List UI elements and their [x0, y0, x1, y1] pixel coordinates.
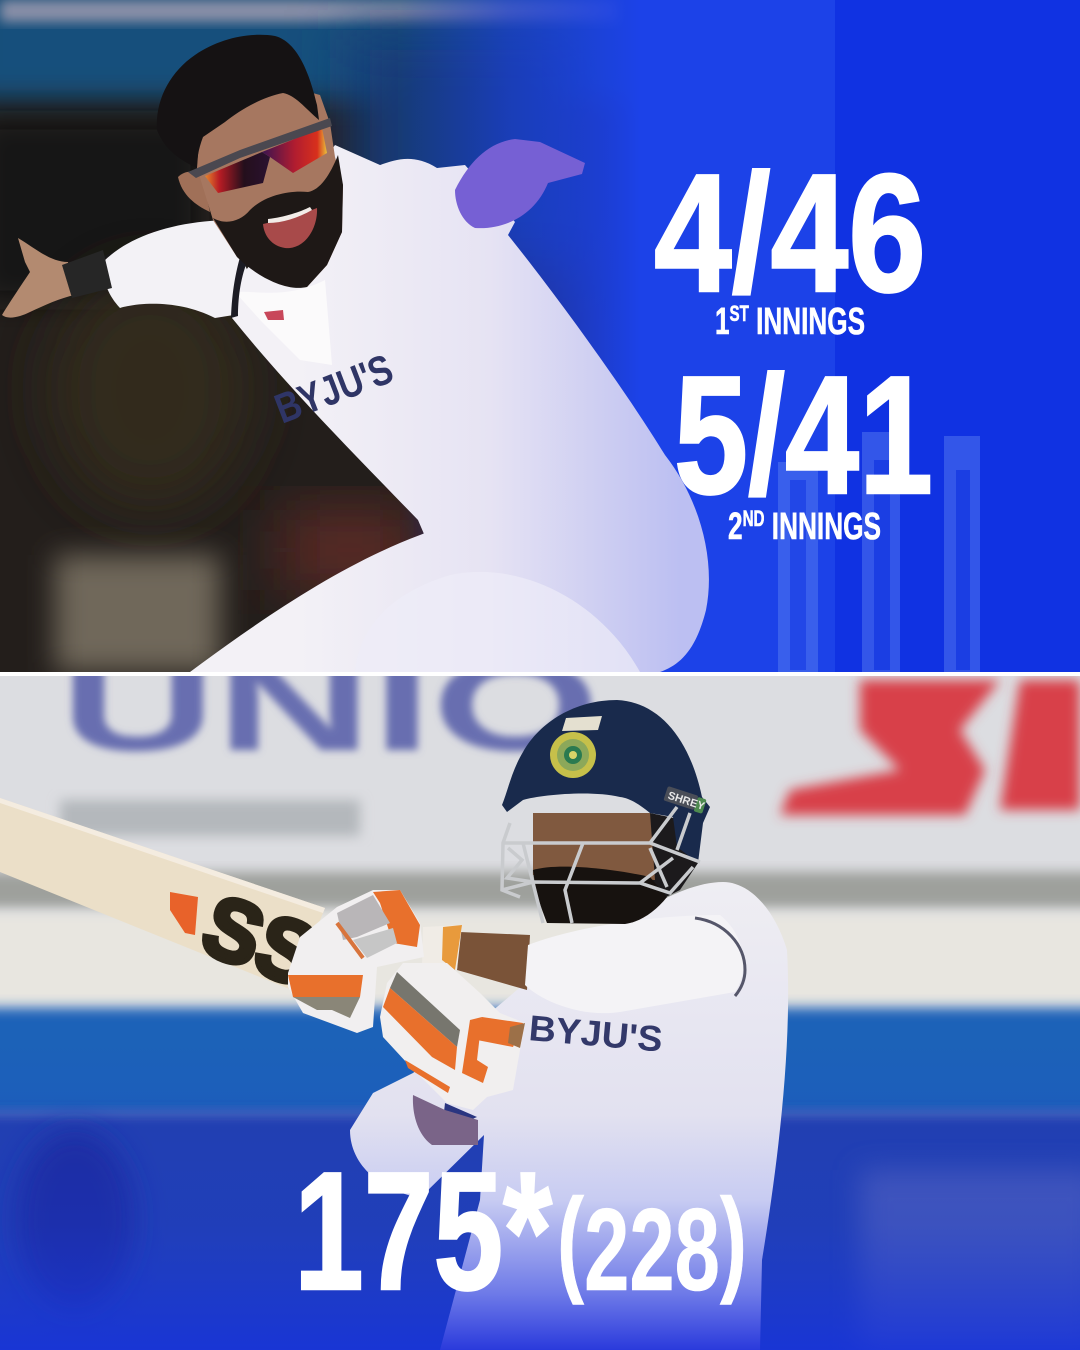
lower sleeve and torso: [350, 882, 788, 1350]
left glove: [288, 890, 424, 1033]
open mouth: [263, 208, 317, 248]
label: first innings: ST: [730, 301, 749, 326]
right glove: [380, 963, 525, 1120]
forearm: [457, 932, 530, 990]
label: second innings: INNINGS: [765, 506, 881, 548]
wrist guard: [457, 932, 462, 970]
batting score: 175*: [294, 1137, 552, 1325]
batter figure: [288, 700, 788, 1350]
bat logo: SS: [191, 875, 330, 1006]
back arm sleeve: [105, 220, 247, 318]
bowling figure: first innings: 4/46: [654, 139, 926, 327]
face: [533, 813, 655, 880]
blurred ground background: [0, 632, 1080, 1350]
panel: bowling photo: [0, 0, 1080, 672]
label: second innings: 2: [728, 506, 749, 548]
sunglasses: [188, 118, 332, 193]
lower wrist: [413, 1095, 478, 1145]
hair: [157, 35, 319, 168]
sleeve: [525, 915, 743, 1013]
label: first innings: 1: [715, 301, 736, 343]
helmet flag: [562, 716, 602, 731]
ear: [178, 172, 210, 212]
balls faced: ): [720, 1174, 747, 1305]
trousers: [190, 455, 709, 672]
bowler figure: [2, 35, 709, 672]
helmet: [502, 700, 710, 863]
helmet badge: [550, 732, 596, 778]
blurred stadium background: [0, 0, 1080, 672]
beard: [213, 155, 343, 288]
shirt: [232, 145, 665, 548]
sponsor blur shapes: UNIO: [60, 632, 600, 778]
bat: [0, 798, 330, 1006]
bat logo mark: [170, 892, 198, 935]
helmet tag: SHREY: [666, 790, 707, 813]
back hand and wrist: [2, 238, 75, 318]
head side: [650, 813, 698, 905]
face: [197, 85, 343, 287]
balls faced: (: [557, 1174, 596, 1305]
shirt sponsor: BYJU'S: [527, 1007, 664, 1060]
panel: batting photo: [0, 632, 1080, 1350]
balls faced: 228: [584, 1184, 720, 1315]
bowling figure: second innings: 5/41: [674, 341, 933, 529]
shirt sponsor: BYJU'S: [268, 345, 399, 432]
raised hand: [455, 139, 585, 228]
label: second innings: ND: [743, 506, 765, 531]
collar: [235, 280, 332, 365]
stumps: [778, 432, 980, 672]
beard: [533, 867, 667, 924]
label: first innings: INNINGS: [749, 301, 865, 343]
helmet grille: [502, 807, 700, 923]
